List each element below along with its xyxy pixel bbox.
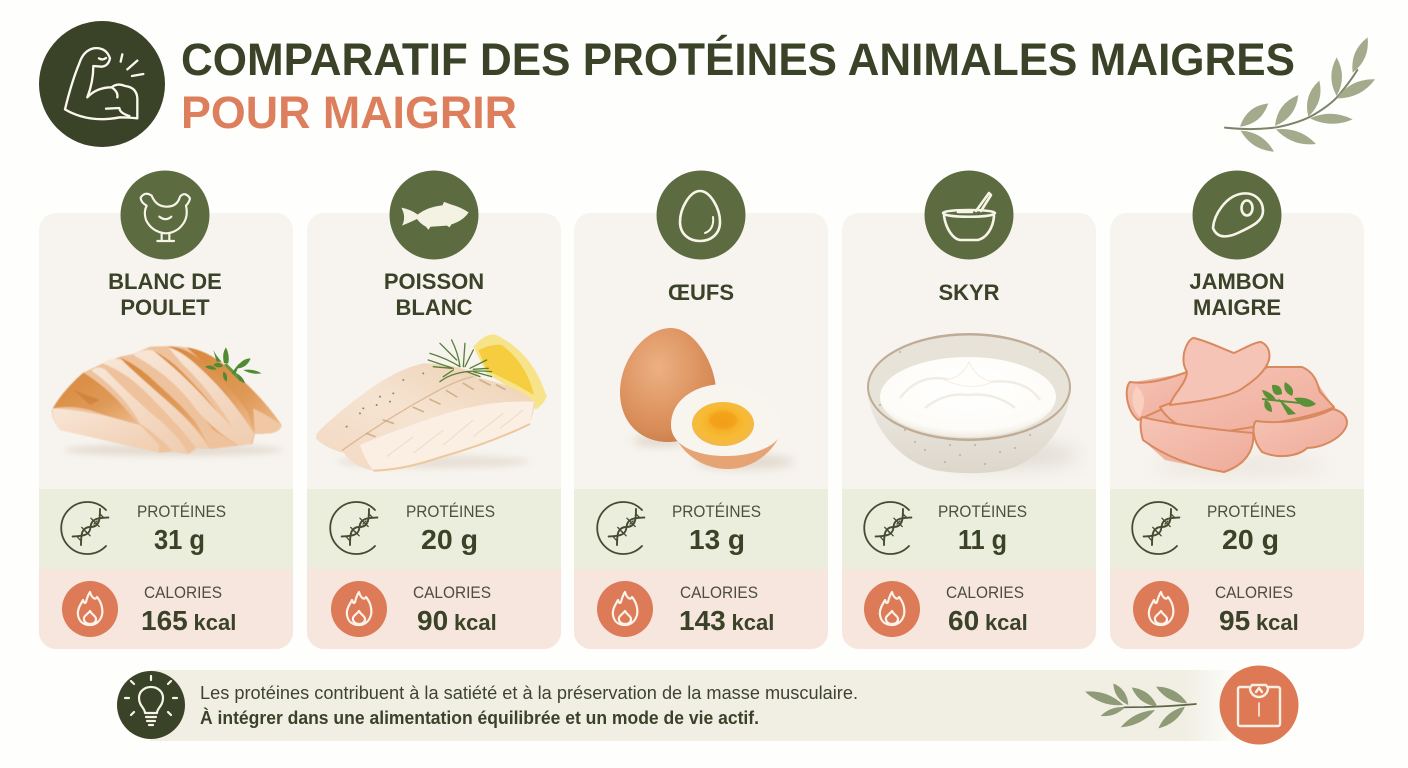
stat band: protéines: PROTÉINES	[938, 502, 1027, 521]
stat band: protéines: 20 g	[1222, 524, 1279, 555]
icon: bathroom scale	[1220, 666, 1298, 744]
whole egg	[620, 328, 716, 442]
illustration: ham slices	[1127, 338, 1347, 473]
stat band: protéines	[842, 489, 1096, 569]
heading: jambon maigre: MAIGRE	[1193, 295, 1281, 320]
stat band: protéines: PROTÉINES	[672, 502, 761, 521]
stat band: calories: 143 kcal	[679, 605, 774, 636]
heading: skyr: SKYR	[938, 280, 1000, 305]
herb sprig	[205, 347, 262, 383]
stat band: calories: 90 kcal	[417, 605, 497, 636]
panel: poisson blanc	[307, 213, 561, 649]
heading: poisson blanc: BLANC	[396, 295, 473, 320]
panel: oeufs	[574, 213, 828, 649]
heading: jambon maigre: JAMBON	[1189, 269, 1285, 294]
note text: Les protéines contribuent à la satiété et à la préservation de la masse musculaire.	[200, 683, 858, 703]
stat band: calories: 60 kcal	[948, 605, 1028, 636]
title	[181, 34, 1295, 138]
stat band: calories	[1110, 569, 1364, 649]
stat band: protéines: 31 g	[154, 524, 205, 555]
stat band: protéines: PROTÉINES	[137, 502, 226, 521]
stat band: protéines: PROTÉINES	[406, 502, 495, 521]
decorative olive branch, top right	[1225, 37, 1375, 152]
title: POUR MAIGRIR	[181, 87, 517, 138]
halved egg	[672, 428, 781, 469]
stat band: protéines	[39, 489, 293, 569]
herb sprig	[1262, 382, 1316, 415]
stat band: protéines: 11 g	[958, 524, 1007, 555]
stat band: calories: CALORIES	[946, 583, 1024, 602]
panel: skyr	[842, 213, 1096, 649]
stat band: calories: CALORIES	[1215, 583, 1293, 602]
stat band: protéines	[574, 489, 828, 569]
illustration: bowl of skyr	[867, 333, 1080, 473]
stat band: calories	[574, 569, 828, 649]
bottom banner	[150, 670, 1240, 741]
stat band: calories: 95 kcal	[1219, 605, 1299, 636]
stat band: calories	[842, 569, 1096, 649]
note emphasis: À intégrer dans une alimentation équilibrée et un mode de vie actif.	[200, 707, 759, 728]
stat band: calories	[307, 569, 561, 649]
heading: blanc de poulet: BLANC DE	[108, 269, 222, 294]
heading: oeufs: ŒUFS	[668, 280, 734, 305]
stat band: calories: CALORIES	[144, 583, 222, 602]
icon: light bulb	[117, 671, 185, 739]
illustration: sliced chicken breast	[52, 346, 283, 456]
header icon: flexed muscle	[39, 21, 165, 147]
stat band: calories: 165 kcal	[141, 605, 236, 636]
panel: jambon maigre	[1110, 213, 1364, 649]
decorative olive branch, bottom	[1085, 683, 1196, 728]
stat band: calories: CALORIES	[680, 583, 758, 602]
heading: blanc de poulet: POULET	[120, 295, 210, 320]
title: COMPARATIF DES PROTÉINES ANIMALES MAIGRES	[181, 34, 1295, 85]
stat band: calories: CALORIES	[413, 583, 491, 602]
stat band: protéines	[1110, 489, 1364, 569]
heading: poisson blanc: POISSON	[384, 269, 484, 294]
icon: bowl	[924, 170, 1014, 260]
lemon wedge	[473, 334, 547, 409]
stat band: protéines: 13 g	[689, 524, 745, 555]
icon: egg	[656, 170, 746, 260]
panel: blanc de poulet	[39, 213, 293, 649]
stat band: calories	[39, 569, 293, 649]
stat band: protéines	[307, 489, 561, 569]
stat band: protéines: PROTÉINES	[1207, 502, 1296, 521]
dill sprig	[428, 340, 492, 382]
icon: chicken	[120, 170, 210, 260]
illustration: eggs	[620, 328, 795, 469]
icon: ham	[1192, 170, 1282, 260]
stat band: protéines: 20 g	[421, 524, 478, 555]
illustration: white fish fillet with lemon	[316, 334, 547, 471]
icon: fish	[390, 170, 478, 260]
